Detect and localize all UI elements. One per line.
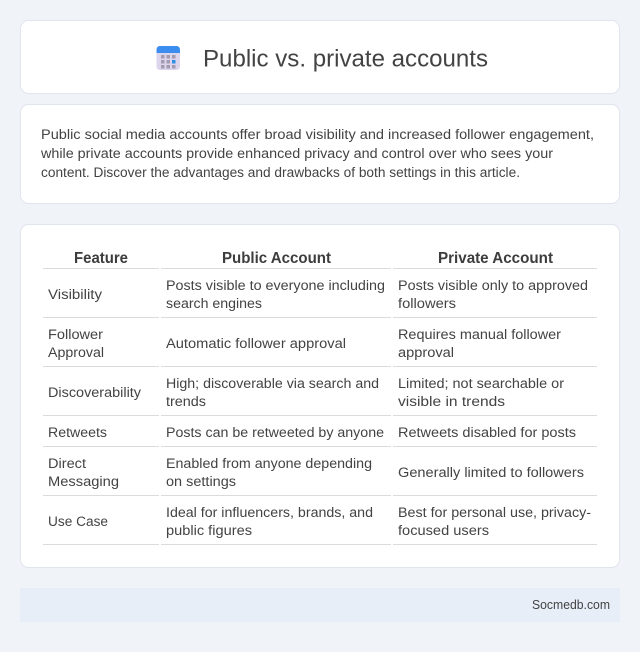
table header: Public Account: [222, 250, 332, 267]
intro text: while private accounts provide enhanced privacy and control over who sees your: [40, 146, 553, 162]
row: visibility: [43, 278, 597, 318]
row: follower approval: Automatic follower approval: [166, 336, 346, 352]
row: discoverability: Discoverability: [48, 385, 142, 401]
row: discoverability: [43, 376, 597, 416]
table header: Feature: [74, 250, 128, 267]
table header: [43, 250, 597, 269]
row: discoverability: High; discoverable via search and: [166, 376, 379, 392]
row: discoverability: trends: [166, 394, 206, 410]
row: use case: public figures: [166, 523, 252, 539]
row: use case: Best for personal use, privacy-: [398, 505, 591, 521]
row: visibility: search engines: [166, 296, 262, 312]
row: follower approval: Approval: [48, 345, 104, 361]
row: follower approval: [43, 327, 597, 367]
intro text: content. Discover the advantages and drawbacks of both settings in this article.: [41, 165, 520, 181]
row: retweets: Retweets disabled for posts: [398, 425, 576, 441]
row: direct messaging: [43, 456, 597, 496]
row: retweets: Retweets: [48, 425, 107, 441]
row: use case: Ideal for influencers, brands, and: [166, 505, 373, 521]
row: retweets: Posts can be retweeted by anyone: [166, 425, 384, 441]
panel: title card: [20, 20, 620, 94]
table header: Private Account: [438, 250, 554, 267]
panel: introduction: [20, 104, 620, 204]
row: use case: focused users: [398, 523, 489, 539]
footer: Socmedb.com: [532, 598, 610, 612]
panel: comparison table: [20, 224, 620, 568]
row: retweets: [43, 425, 597, 447]
intro text: Public social media accounts offer broad visibility and increased follower engagement,: [41, 127, 594, 143]
row: visibility: Posts visible only to approved: [398, 278, 588, 294]
icon: calendar: [156, 46, 180, 70]
row: visibility: Posts visible to everyone including: [166, 278, 385, 294]
row: follower approval: Requires manual follower: [398, 327, 561, 343]
row: direct messaging: Direct: [48, 456, 86, 472]
footer: [20, 588, 620, 622]
row: visibility: Visibility: [48, 287, 103, 303]
row: direct messaging: Enabled from anyone depending: [166, 456, 372, 472]
row: use case: [43, 505, 597, 545]
title: Public vs. private accounts: [203, 46, 488, 72]
row: direct messaging: on settings: [166, 474, 236, 490]
row: use case: Use Case: [48, 514, 108, 530]
row: direct messaging: Messaging: [48, 474, 119, 490]
row: discoverability: visible in trends: [398, 394, 505, 410]
row: follower approval: Follower: [48, 327, 103, 343]
row: direct messaging: Generally limited to followers: [398, 465, 584, 481]
row: discoverability: Limited; not searchable or: [398, 376, 564, 392]
intro text: [40, 127, 594, 181]
row: follower approval: approval: [398, 345, 454, 361]
row: visibility: followers: [398, 296, 456, 312]
